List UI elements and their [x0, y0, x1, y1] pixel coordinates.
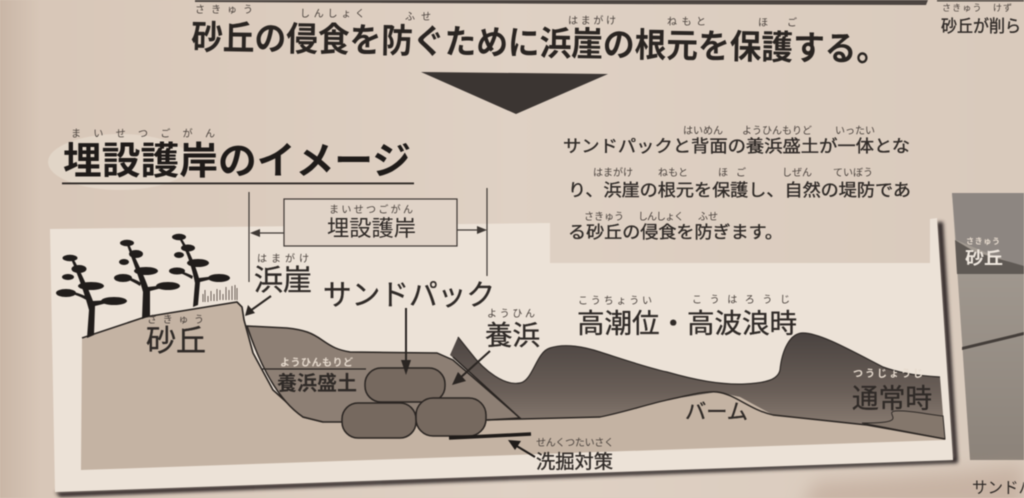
- label: fill embankment: ようひんもりど: [280, 356, 353, 369]
- label: high tide: [577, 294, 797, 339]
- label: fill embankment: 養浜盛土: [277, 371, 357, 395]
- explanatory paragraph: る砂丘の侵食を防ぎます。: [568, 223, 783, 242]
- label: scour countermeasure: [536, 437, 614, 473]
- title ruby: ふせ: [405, 11, 431, 23]
- paragraph ruby: はまがけ: [593, 166, 633, 179]
- top dark edge of upper panel: [195, 0, 928, 5]
- label: sand pack: サンドパック: [323, 280, 495, 312]
- berm line: [487, 392, 945, 439]
- paragraph ruby: はいめん: [683, 125, 723, 137]
- label box: buried revetment: まいせつごがん: [329, 203, 413, 216]
- top right cropped caption: さきゅう けず: [942, 3, 1012, 13]
- label: nourishment: [485, 308, 540, 351]
- label box: buried revetment: 埋設護岸: [327, 216, 416, 241]
- sea surface outline: [458, 333, 940, 384]
- explanatory paragraph: サンドパックと背面の養浜盛土が一体とな: [563, 137, 910, 156]
- sand packs: [342, 368, 486, 438]
- explanatory paragraph: [563, 125, 911, 242]
- label box: buried revetment: [249, 188, 487, 282]
- embankment layer line: [262, 368, 366, 370]
- title ruby: さきゅう: [195, 4, 253, 16]
- label: scour countermeasure: 洗掘対策: [536, 451, 613, 473]
- dune outline: [82, 302, 323, 422]
- label: high tide: こうちょうい: [578, 295, 652, 307]
- heading: 埋設護岸のイメージ: [63, 141, 411, 183]
- paragraph ruby: ほご: [718, 166, 746, 179]
- top right cropped caption: 砂丘が削ら: [941, 17, 1021, 36]
- paragraph ruby: ふせ: [698, 211, 718, 223]
- paragraph ruby: しぜん: [782, 167, 812, 179]
- label: normal tide: 通常時: [852, 384, 932, 414]
- arrow: down triangle: [421, 72, 608, 114]
- title: 砂丘の侵食を防ぐために浜崖の根元を保護する。: [191, 19, 888, 69]
- title ruby: ねもと: [667, 16, 706, 28]
- title ruby: はまがけ: [568, 14, 616, 27]
- title ruby: しんしょく: [300, 8, 365, 20]
- arrow: scour countermeasure: [508, 440, 535, 457]
- label: berm: バーム: [685, 401, 748, 424]
- arrow: sand pack: [401, 308, 411, 375]
- arrow: nourishment: [452, 351, 490, 385]
- paragraph ruby: ねもと: [658, 167, 688, 179]
- slope line: [453, 357, 521, 419]
- hand shadow lower right: [800, 465, 1024, 498]
- sea at high tide: [450, 333, 945, 439]
- title ruby: [195, 4, 797, 29]
- paragraph ruby: [584, 125, 875, 223]
- top right cropped caption: [941, 3, 1021, 36]
- label: normal tide: つうじょうじ: [853, 368, 923, 380]
- photo label: dune: 砂丘: [965, 249, 1003, 268]
- right photo strip: [952, 193, 1024, 460]
- diagram panel paper: [50, 218, 953, 492]
- grass: [203, 285, 237, 302]
- photo label: dune: さきゅう: [966, 237, 1000, 246]
- label: high tide: 高潮位・高波浪時: [577, 309, 797, 339]
- heading: まいせつごがん: [71, 127, 215, 140]
- title ruby: ほご: [758, 16, 797, 29]
- paragraph ruby: ようひんもりど: [742, 125, 812, 137]
- diagram panel shadow: [55, 222, 958, 497]
- top right rule: [937, 0, 1024, 2]
- label: fill embankment: [277, 356, 357, 395]
- label: high tide: こうはろうじ: [692, 294, 790, 306]
- scour protection bar: [449, 434, 531, 438]
- label: nourishment: ようひん: [487, 308, 535, 320]
- normal tide water: [862, 411, 945, 439]
- heading: [48, 127, 414, 190]
- trees: [56, 234, 230, 338]
- label: beach cliff: はまがけ: [257, 252, 309, 265]
- ground cross-section: [81, 302, 945, 470]
- label: scour countermeasure: せんくつたいさく: [536, 437, 614, 449]
- tree 3: [169, 234, 230, 307]
- paragraph ruby: さきゅう: [584, 211, 624, 223]
- explanatory paragraph: り、浜崖の根元を保護し、自然の堤防であ: [568, 181, 911, 200]
- tree 2: [114, 240, 180, 319]
- paragraph ruby: ていぼう: [833, 167, 873, 179]
- fill embankment: [247, 326, 520, 422]
- label: dune: 砂丘: [146, 325, 206, 358]
- label: nourishment: 養浜: [485, 321, 540, 351]
- label: beach cliff: 浜崖: [254, 264, 312, 297]
- tree 1: [56, 255, 127, 338]
- label: dune: さきゅう: [147, 314, 204, 326]
- photo label: dune: [965, 237, 1003, 268]
- paragraph ruby: いったい: [835, 125, 875, 137]
- arrow: beach cliff: [245, 296, 271, 316]
- label: normal tide: [852, 368, 932, 414]
- paragraph ruby: しんしょく: [638, 211, 684, 223]
